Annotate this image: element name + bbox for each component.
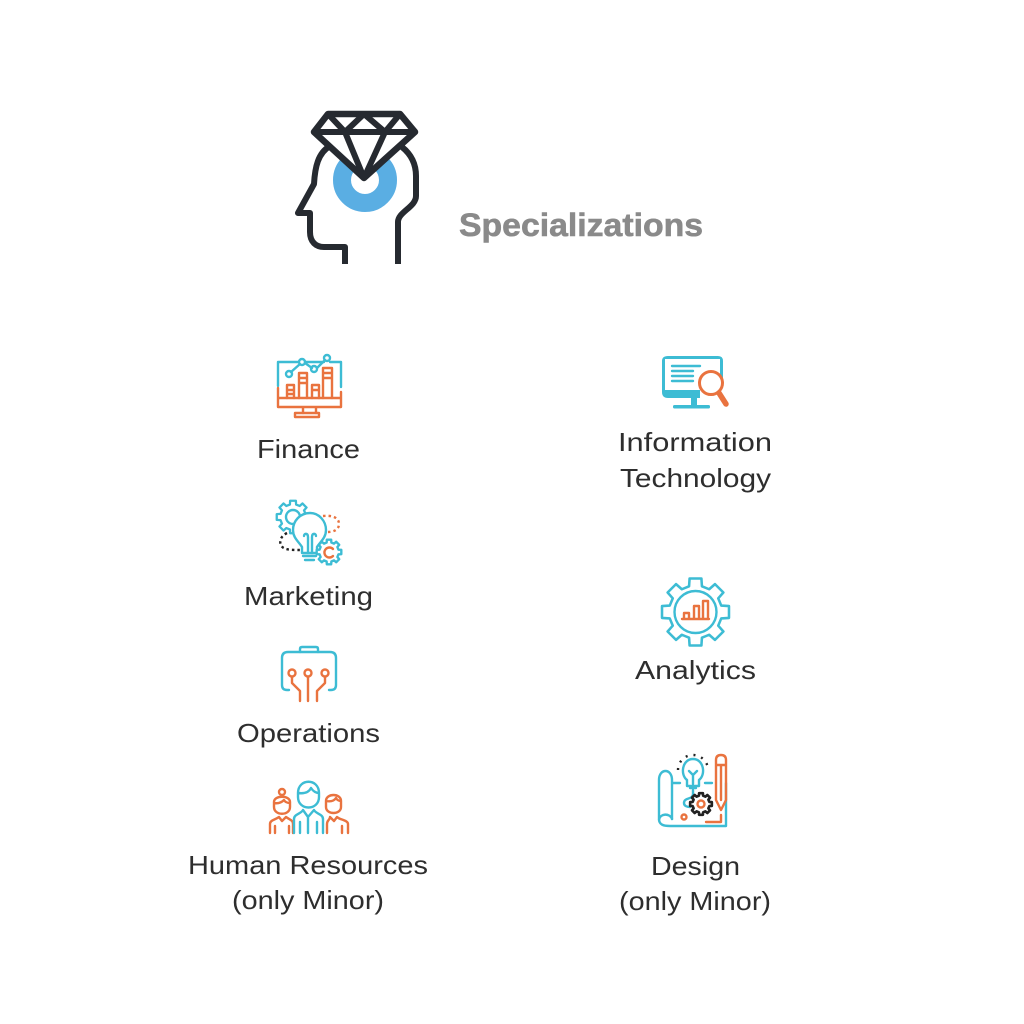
icon: three people [270,782,348,833]
header: icon and title [298,114,703,264]
label line 2: Technology [620,463,771,493]
panel: Marketing [244,501,373,611]
icon: briefcase with circuit [282,647,336,701]
label: Operations [237,718,380,748]
label note: (only Minor) [619,886,771,916]
icon: monitor with bar chart [278,355,341,417]
panel: Human Resources [188,782,428,915]
label: Human Resources [188,850,428,880]
icon: monitor with magnifier [662,356,726,408]
icon: blueprint with bulb and pencil [659,755,726,826]
label: Marketing [244,581,373,611]
panel: Finance [257,355,360,464]
panel: Design [619,755,771,916]
label: Analytics [635,655,756,685]
label note: (only Minor) [232,885,384,915]
label: Finance [257,434,360,464]
label: Information [618,427,772,457]
title: Specializations [459,207,703,243]
panel: Analytics [635,579,756,685]
panel: Operations [237,647,380,748]
icon: head with diamond [298,114,416,264]
panel: Information Technology [618,356,772,493]
icon: light bulb with gears [277,501,341,564]
label: Design [651,851,740,881]
icon: gear with bar chart [662,579,729,645]
